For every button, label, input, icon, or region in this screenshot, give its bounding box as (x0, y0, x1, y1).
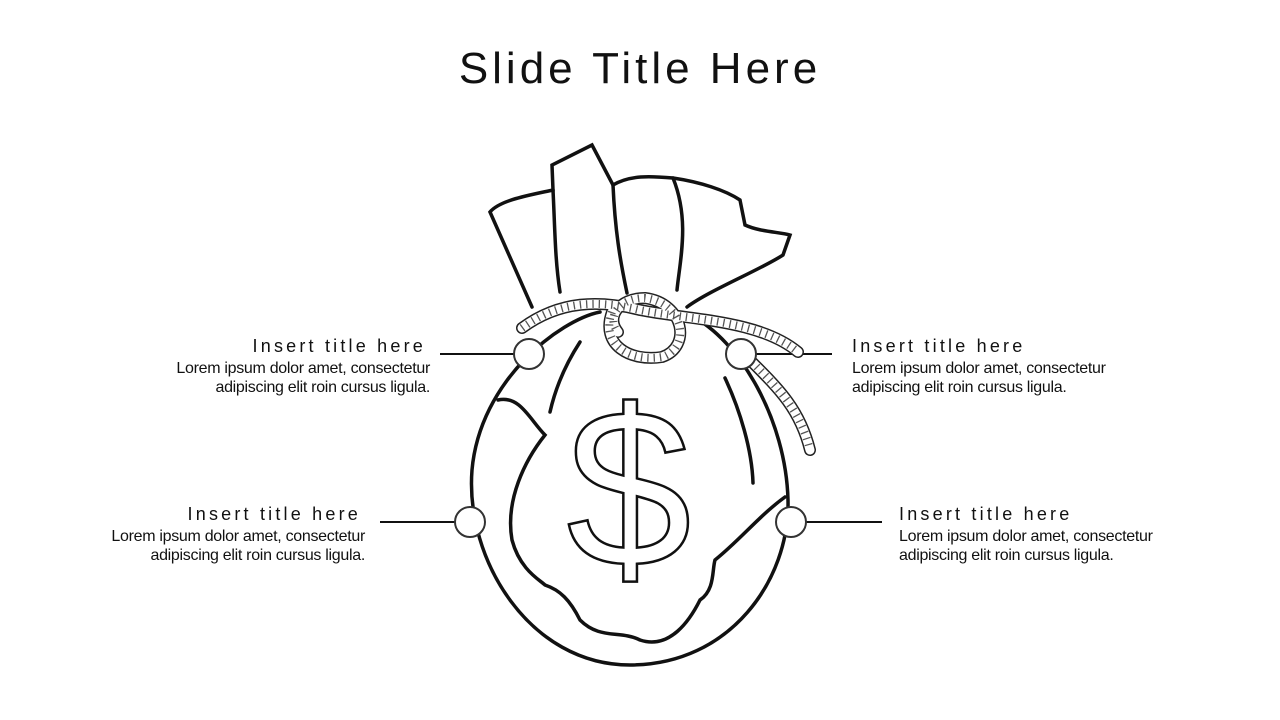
connector lines (380, 354, 882, 522)
text: adipiscing elit roin cursus ligula. (215, 379, 430, 396)
bag body (471, 145, 790, 665)
text: Insert title here (188, 504, 361, 524)
text: Insert title here (852, 336, 1025, 356)
text: Insert title here (899, 504, 1072, 524)
text: Lorem ipsum dolor amet, consectetur (852, 360, 1106, 377)
text block: top left (176, 336, 430, 396)
text block: bottom right (899, 504, 1153, 564)
text block: top right (852, 336, 1106, 396)
bag flaps (490, 145, 790, 307)
text: Lorem ipsum dolor amet, consectetur (111, 528, 365, 545)
text block: bottom left (111, 504, 366, 564)
rope (522, 298, 810, 450)
text: Insert title here (253, 336, 426, 356)
text: adipiscing elit roin cursus ligula. (852, 379, 1067, 396)
icon: dollar sign: $ (566, 362, 692, 614)
text: Lorem ipsum dolor amet, consectetur (899, 528, 1153, 545)
text: adipiscing elit roin cursus ligula. (899, 547, 1114, 564)
nodes (455, 339, 806, 537)
title: Slide Title Here (459, 44, 821, 93)
text: Lorem ipsum dolor amet, consectetur (176, 360, 430, 377)
text: adipiscing elit roin cursus ligula. (150, 547, 365, 564)
